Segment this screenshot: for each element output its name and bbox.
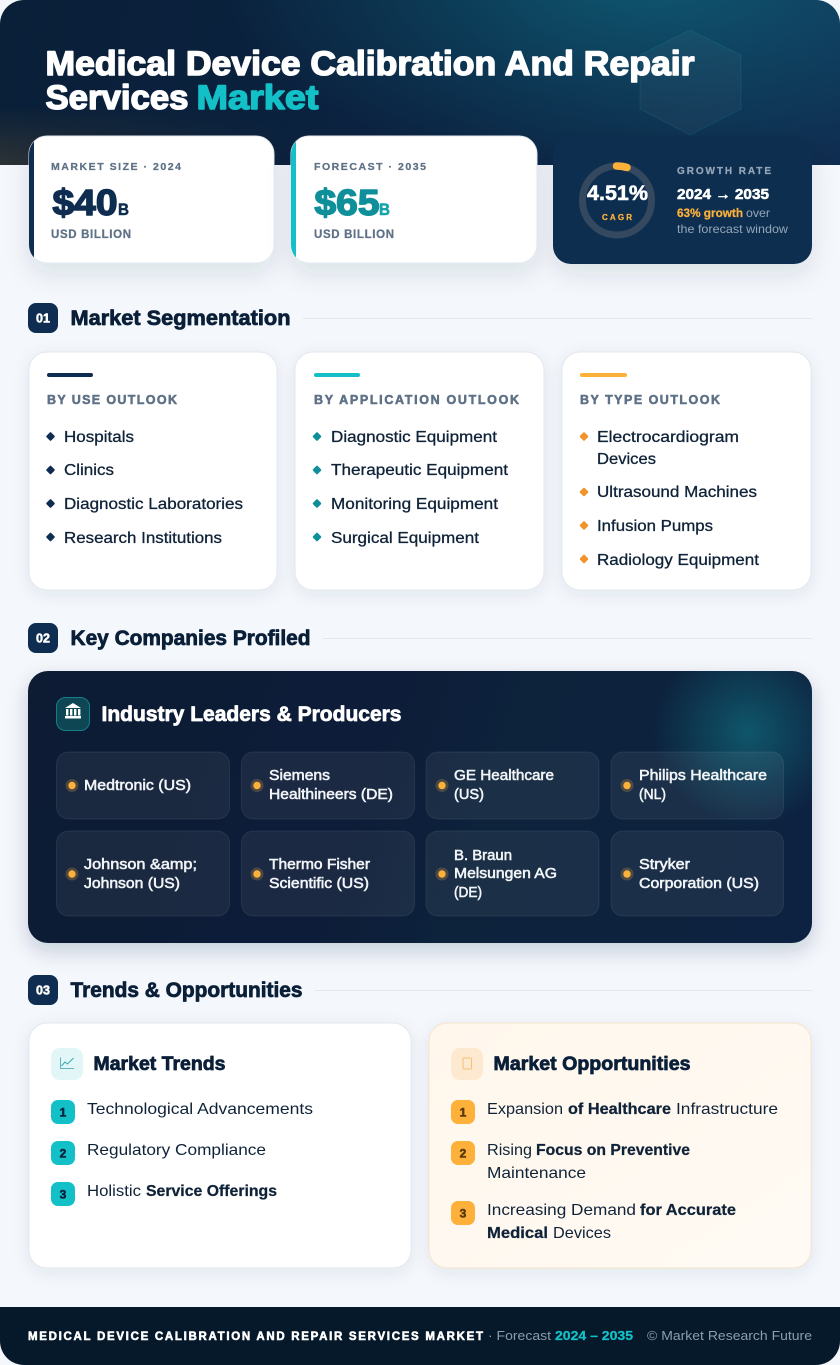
- chart: CAGR ring: [582, 166, 652, 235]
- company names: Stryker: [639, 857, 690, 873]
- company names: Siemens: [269, 768, 330, 784]
- panel: by use outlook: Diagnostic Laboratories: [64, 496, 243, 513]
- footer: 2024 – 2035: [555, 1329, 633, 1343]
- stat card: market size 2024: USD BILLION: [51, 229, 131, 241]
- panel: by application outlook: [295, 352, 544, 590]
- panel: industry leaders: Industry Leaders & Producers: [102, 703, 402, 726]
- company names: [84, 768, 767, 901]
- panel: market opportunities: 2: [460, 1146, 467, 1160]
- heading: trends and opportunities: 03: [36, 982, 50, 998]
- company names: (DE): [454, 885, 482, 901]
- panel: by type outlook: [562, 352, 811, 590]
- company chips: [56, 752, 784, 916]
- icon: missing glyph box: [451, 1048, 483, 1080]
- icon: bank building: [56, 698, 90, 730]
- panel: market opportunities: Infrastructure: [676, 1101, 778, 1118]
- panel: market opportunities: Focus on Preventive: [536, 1142, 690, 1159]
- panel: market opportunities: of Healthcare: [568, 1101, 671, 1118]
- footer: [0, 1307, 840, 1365]
- panel: market opportunities: 1: [460, 1106, 467, 1120]
- panel: by type outlook: Ultrasound Machines: [597, 484, 757, 501]
- company names: (NL): [639, 787, 666, 803]
- company names: Scientific (US): [269, 876, 369, 892]
- footer: · Forecast: [488, 1329, 552, 1343]
- title: Market: [196, 79, 319, 117]
- panel: market trends: Technological Advancements: [87, 1101, 313, 1118]
- panel: market opportunities: Market Opportunities: [494, 1054, 690, 1075]
- company names: Johnson &amp;: [84, 857, 197, 873]
- panel: market opportunities: Devices: [553, 1225, 611, 1242]
- stat card: market size 2024: MARKET SIZE · 2024: [51, 161, 181, 173]
- title: Services: [46, 79, 188, 117]
- company names: Johnson (US): [84, 876, 180, 892]
- stat card: market size 2024: [29, 136, 274, 263]
- heading: market segmentation: 01: [36, 310, 50, 326]
- panel: by type outlook: Infusion Pumps: [597, 518, 713, 535]
- panel: market trends: [29, 1023, 411, 1268]
- panel: by application outlook: Therapeutic Equipment: [331, 462, 509, 479]
- panel: market trends: Market Trends: [94, 1054, 226, 1075]
- stat card: market size 2024: B: [118, 200, 129, 219]
- heading: trends and opportunities: [28, 975, 812, 1005]
- stat card: growth rate: [553, 136, 812, 264]
- panel: by use outlook: Research Institutions: [64, 530, 222, 547]
- footer: MEDICAL DEVICE CALIBRATION AND REPAIR SERVICES MARKET: [28, 1331, 483, 1343]
- stat card: growth rate: 2024 → 2035: [677, 186, 769, 203]
- panel: market opportunities: Rising: [487, 1142, 532, 1159]
- heading: trends and opportunities: Trends & Opportunities: [70, 979, 302, 1002]
- panel: market trends: 3: [60, 1188, 67, 1202]
- panel: by type outlook: BY TYPE OUTLOOK: [580, 393, 720, 407]
- panel: market opportunities: [429, 1023, 811, 1268]
- panel: market opportunities: Increasing Demand: [487, 1202, 636, 1219]
- panel: market trends: 2: [60, 1146, 67, 1160]
- heading: key companies: 02: [36, 630, 50, 646]
- company names: Melsungen AG: [454, 866, 557, 882]
- heading: market segmentation: Market Segmentation: [70, 307, 290, 330]
- chart: CAGR ring: 4.51%: [587, 181, 648, 205]
- panel: by application outlook: Monitoring Equipment: [331, 496, 499, 513]
- panel: market opportunities: Medical: [487, 1225, 548, 1242]
- stat card: market size 2024: $40: [52, 182, 118, 223]
- company names: Philips Healthcare: [639, 768, 767, 784]
- panel: by application outlook: Surgical Equipment: [331, 530, 480, 547]
- stat card: growth rate: over: [746, 206, 770, 220]
- title: [46, 45, 694, 117]
- company names: Corporation (US): [639, 876, 759, 892]
- company names: (US): [454, 787, 484, 803]
- panel: market opportunities: for Accurate: [640, 1202, 736, 1219]
- panel: by type outlook: Devices: [597, 451, 656, 468]
- panel: market opportunities: Expansion: [487, 1101, 563, 1118]
- panel: market opportunities: 3: [460, 1206, 467, 1220]
- panel: by application outlook: Diagnostic Equipment: [331, 429, 498, 446]
- panel: by type outlook: Electrocardiogram: [597, 429, 739, 446]
- panel: industry leaders: [28, 671, 812, 943]
- heading: market segmentation: [28, 303, 812, 333]
- panel: market trends: 1: [60, 1106, 67, 1120]
- panel: market opportunities: Maintenance: [487, 1165, 586, 1182]
- panel: by type outlook: Radiology Equipment: [597, 552, 760, 569]
- chip status dots: [66, 779, 634, 880]
- panel: market trends: Regulatory Compliance: [87, 1142, 266, 1159]
- company names: GE Healthcare: [454, 768, 554, 784]
- heading: key companies: [28, 623, 812, 653]
- panel: by use outlook: BY USE OUTLOOK: [47, 393, 177, 407]
- chart: CAGR ring: CAGR: [602, 213, 632, 222]
- icon: line chart: [51, 1048, 83, 1080]
- stat card: growth rate: GROWTH RATE: [677, 166, 771, 177]
- title: Medical Device Calibration And Repair: [46, 45, 694, 83]
- company names: Thermo Fisher: [269, 857, 370, 873]
- stat card: growth rate: 63% growth: [677, 206, 743, 220]
- company names: B. Braun: [454, 848, 512, 864]
- panel: by use outlook: [29, 352, 277, 590]
- company names: Medtronic (US): [84, 778, 191, 794]
- stat card: forecast 2035: USD BILLION: [314, 229, 394, 241]
- panel: by use outlook: Hospitals: [64, 429, 134, 446]
- company names: Healthineers (DE): [269, 787, 393, 803]
- stat card: forecast 2035: [291, 136, 537, 263]
- stat card: forecast 2035: FORECAST · 2035: [314, 161, 426, 173]
- stat card: growth rate: the forecast window: [677, 222, 788, 236]
- icon: decorative hexagon: [640, 30, 741, 135]
- header band: [0, 0, 840, 165]
- heading: key companies: Key Companies Profiled: [70, 627, 310, 650]
- panel: by application outlook: BY APPLICATION OUTLOOK: [314, 393, 519, 407]
- stat card: forecast 2035: $65: [314, 182, 380, 223]
- panel: by use outlook: Clinics: [64, 462, 114, 479]
- panel: market trends: Holistic: [87, 1183, 141, 1200]
- footer: © Market Research Future: [647, 1329, 812, 1343]
- panel: market trends: Service Offerings: [146, 1183, 277, 1200]
- stat card: forecast 2035: B: [379, 200, 390, 219]
